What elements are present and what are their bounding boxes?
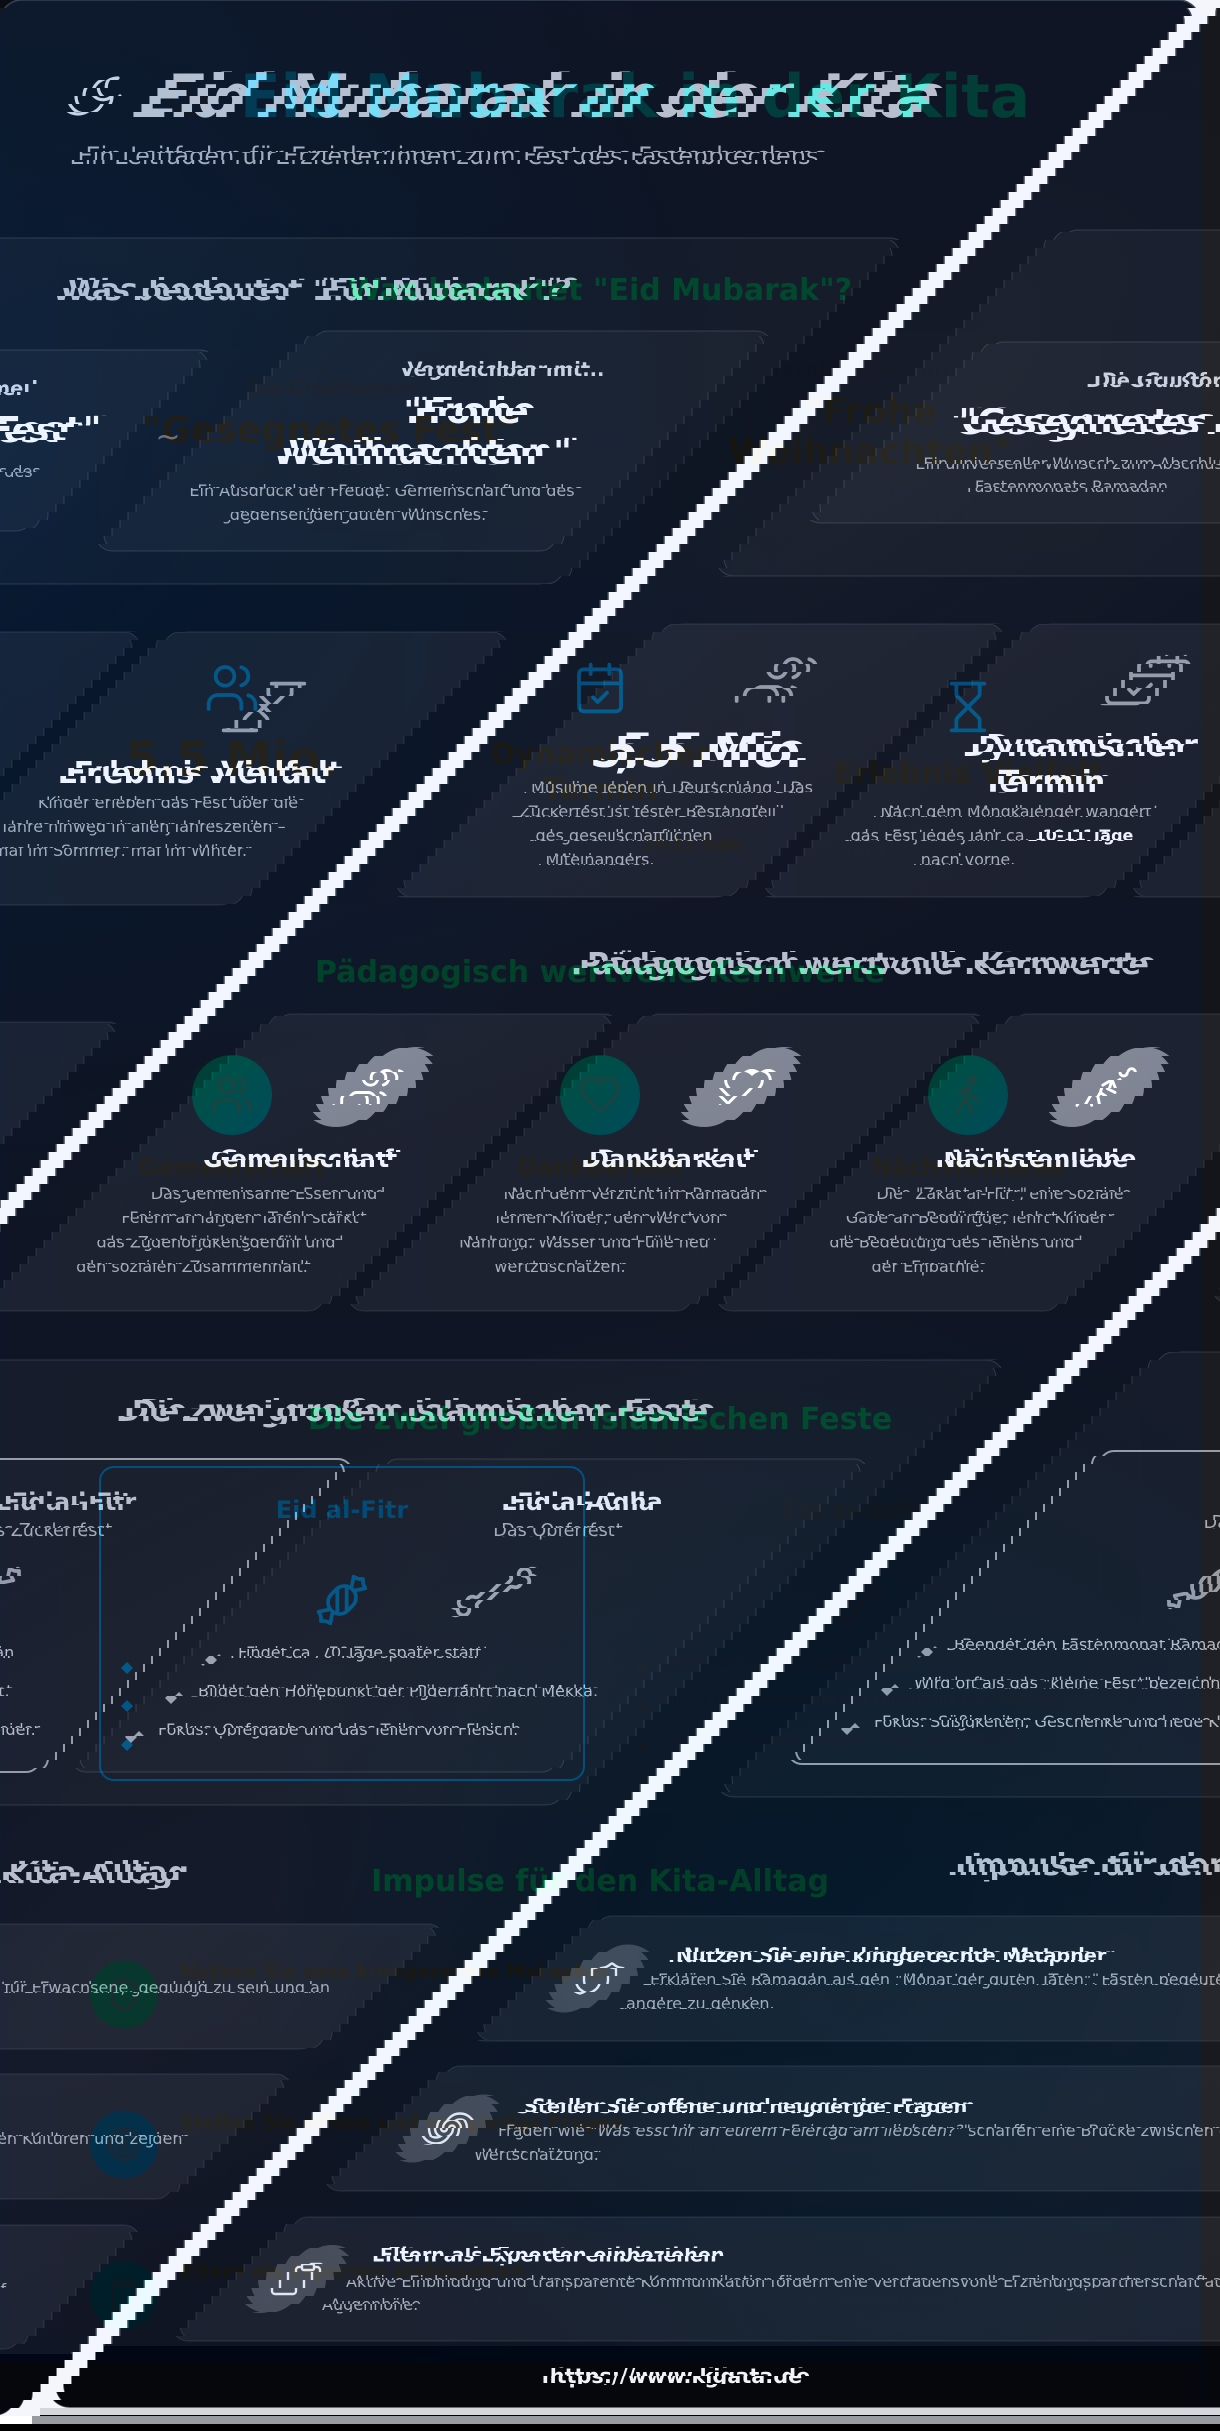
card: Eid al-Adha: Findet ca. 70 Tage später statt. — [662, 1651, 910, 1670]
panel: meaning of Eid Mubarak — [60, 238, 1140, 584]
icon: community circle — [192, 1055, 272, 1135]
icon: bone — [835, 1577, 881, 1623]
stat card: 5,5 Mio: des gesellschaftlichen — [143, 834, 321, 853]
card: greeting: Ein universeller Wunsch zum Abschluss des — [155, 462, 505, 481]
card: greeting — [100, 350, 560, 531]
value card: charity: Die "Zakat al-Fitr", eine soziale — [844, 1192, 1092, 1211]
card: Eid al-Fitr: Wird oft als das "kleine Fest" bezeichnet. — [146, 1690, 474, 1708]
tip card: parents: Augenhöhe. — [178, 2311, 274, 2330]
card: greeting: Fastenmonats Ramadan. — [231, 485, 429, 504]
stat card: dynamic date: Dynamischer — [490, 737, 710, 772]
stat card: dynamic date — [428, 632, 772, 905]
heading: Was bedeutet "Eid Mubarak"? — [348, 273, 852, 308]
footer: https://www.kigata.de — [470, 2380, 730, 2404]
stat card: 5,5 Mio: 5,5 Mio. — [126, 732, 338, 787]
value card: charity: die Bedeutung des Teilens und — [845, 1240, 1091, 1260]
stat card: dynamic date: das Fest jedes Jahr ca. 10-11 Tage — [459, 834, 742, 853]
tip card: questions: Stellen Sie offene und neugierige Fragen — [180, 2111, 623, 2134]
tip card: parents: Eltern als Experten einbeziehen — [180, 2260, 525, 2282]
stat card: 5,5 Mio: Zuckerfest ist fester Bestandteil — [104, 810, 360, 829]
icon: users — [209, 667, 255, 709]
stat card: variety: Jahre hinweg in allen Jahreszeiten – — [825, 817, 1110, 836]
card: Eid al-Adha: Das Opferfest — [797, 1529, 919, 1549]
value card: community — [60, 1022, 404, 1319]
stat card: variety: mal im Sommer, mal im Winter. — [841, 841, 1095, 860]
heading: impulses: Impulse für den Kita-Alltag — [371, 1864, 829, 1899]
card: comparison: gegenseitigen guten Wunsches. — [742, 505, 998, 524]
value card: charity: Nächstenliebe — [872, 1153, 1064, 1181]
icon: heart circle — [560, 1055, 640, 1135]
card: Eid al-Adha: Bildet den Höhepunkt der Pilgerfahrt nach Mekka. — [662, 1690, 1062, 1708]
card: Eid al-Adha: Fokus: Opfergabe und das Teilen von Fleisch. — [662, 1728, 1022, 1747]
card: Eid al-Fitr — [100, 1467, 584, 1780]
tip card: questions: Fragen wie "Was esst ihr an eurem Feiertag am liebsten?" schaffen eine Brücke zwischen den Kulturen und zeigen — [178, 2137, 1094, 2156]
icon: crescent moon — [172, 78, 208, 114]
value card: community: das Zugehörigkeitsgefühl und — [112, 1240, 352, 1260]
header — [172, 63, 1030, 170]
tip card: metaphor: andere zu denken. — [178, 2010, 327, 2029]
tip card: parents: Aktive Einbindung und transparente Kommunikation fördern eine vertrauensvolle Erziehungspartnerschaft auf — [178, 2288, 1062, 2307]
stat card: variety: Erlebnis Vielfalt — [834, 756, 1102, 791]
icon: calendar — [579, 665, 621, 711]
stat card: variety: Kinder erleben das Fest über die — [838, 793, 1098, 812]
value card: community: Feiern an langen Tafeln stärkt — [113, 1216, 351, 1235]
value card: charity: der Empathie. — [911, 1265, 1025, 1284]
panel: two festivals — [60, 1368, 1140, 1813]
tip card: questions: Wertschätzung. — [178, 2161, 303, 2180]
stat card: dynamic date: nach vorne. — [553, 858, 647, 877]
tilde symbol: ~ — [587, 420, 613, 455]
card: Eid al-Fitr: Das Zuckerfest — [276, 1529, 408, 1549]
card: comparison: Weihnachten" — [728, 432, 1012, 473]
tip card: metaphor: Nutzen Sie eine kindgerechte Metapher — [180, 1960, 611, 1983]
icon: shield circle — [90, 1960, 158, 2028]
stat card: 5,5 Mio: Muslime leben in Deutschland. Das — [91, 786, 373, 805]
title: Eid Mubarak in der Kita — [240, 63, 1030, 132]
value card: community: den sozialen Zusammenhalt. — [116, 1265, 348, 1284]
card: Eid al-Fitr: Eid al-Fitr — [276, 1496, 408, 1524]
heading: Die zwei großen islamischen Feste — [308, 1402, 892, 1437]
card: Eid al-Adha — [616, 1467, 1100, 1780]
tip card: metaphor — [60, 1932, 1140, 2057]
card: comparison: Vergleichbar mit... — [768, 358, 972, 381]
stat card: 5,5 Mio — [60, 632, 404, 905]
heading: core values: Pädagogisch wertvolle Kernwerte — [315, 955, 885, 990]
value card: charity — [796, 1022, 1140, 1319]
stat card: 5,5 Mio: Miteinanders. — [178, 858, 286, 877]
card: greeting: "Gesegnetes Fest" — [143, 410, 517, 451]
tip card: metaphor: Erklären Sie Ramadan als den "Monat der guten Taten". Fasten bedeutet für Erwachsene, geduldig zu sein und an — [178, 1986, 1090, 2005]
footer — [0, 2362, 1200, 2423]
card: Eid al-Adha: Eid al-Adha — [781, 1496, 935, 1524]
value card: gratitude: Dankbarkeit — [517, 1153, 683, 1181]
icon: walking person circle — [928, 1055, 1008, 1135]
subtitle: Ein Leitfaden für Erzieher:innen zum Fest des Fastenbrechens — [229, 142, 971, 170]
tip card: questions — [60, 2082, 1140, 2207]
value card: charity: Gabe an Bedürftige, lehrt Kinder — [838, 1216, 1099, 1235]
value card: gratitude: lernen Kinder, den Wert von — [488, 1216, 712, 1235]
stat card: dynamic date: Termin — [543, 773, 657, 808]
value card: gratitude — [428, 1022, 772, 1319]
card: Eid al-Fitr: Beendet den Fastenmonat Ramadan. — [146, 1651, 443, 1670]
value card: gratitude: Nach dem Verzicht im Ramadan — [472, 1192, 728, 1211]
icon: target circle — [90, 2110, 158, 2178]
stat card: dynamic date: Nach dem Mondkalender wandert — [464, 810, 736, 829]
card: comparison: "Frohe — [803, 391, 937, 432]
card: Eid al-Fitr: Fokus: Süßigkeiten, Geschenke und neue Kleider. — [146, 1728, 540, 1747]
card: comparison: Ein Ausdruck der Freude, Gemeinschaft und des — [677, 481, 1063, 500]
value card: gratitude: wertzuschätzen. — [534, 1265, 666, 1284]
icon: hourglass — [952, 684, 984, 730]
icon: candy — [319, 1577, 365, 1623]
card: comparison — [640, 331, 1100, 551]
value card: gratitude: Nahrung, Wasser und Fülle neu — [475, 1240, 725, 1260]
stat card: variety — [796, 632, 1140, 905]
value card: community: Gemeinschaft — [139, 1153, 325, 1181]
value card: community: Das gemeinsame Essen und — [119, 1192, 345, 1211]
icon: clipboard circle — [90, 2261, 158, 2329]
card: greeting: Die Grußformel — [246, 377, 414, 400]
tip card: parents — [60, 2233, 1140, 2357]
